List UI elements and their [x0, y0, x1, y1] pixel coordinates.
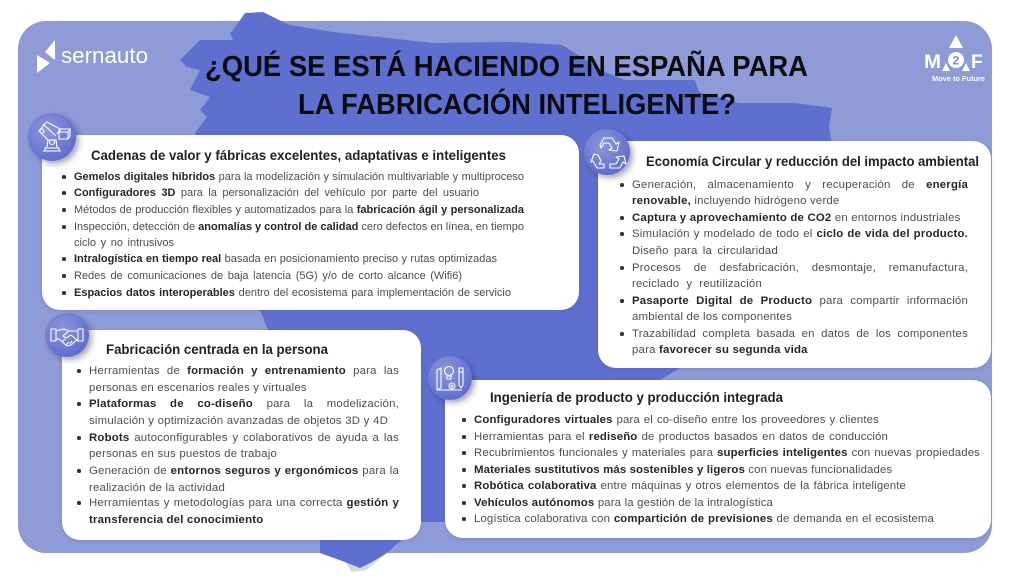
- panel: economía circular: Pasaporte Digital de Producto para compartir información: [632, 295, 968, 307]
- logo: Move to Future: Move to Future: [932, 74, 985, 83]
- panel: fabricación centrada en la persona: Herramientas y metodologías para una correcta gestión y: [89, 497, 399, 509]
- panel: ingeniería de producto: Recubrimientos funcionales y materiales para superficies inteligentes con nuevas propiedades: [474, 447, 980, 459]
- icon: recycling: [584, 129, 636, 182]
- panel: fabricación centrada en la persona: Plataformas de co-diseño para la modelización,: [89, 398, 399, 410]
- panel: cadenas de valor: Configuradores 3D para la personalización del vehículo por parte del usuario: [74, 187, 479, 199]
- logo: sernauto: sernauto: [61, 43, 148, 68]
- heading: ingeniería de producto: Ingeniería de producto y producción integrada: [490, 389, 783, 405]
- panel: economía circular: para favorecer su segunda vida: [632, 344, 808, 356]
- panel: fabricación centrada en la persona: Robots autoconfigurables y colaborativos de ayuda a las: [89, 432, 399, 444]
- panel: fabricación centrada en la persona: simulación y optimización avanzadas de objetos 3D y 4D: [89, 415, 388, 427]
- panel: ingeniería de producto: Herramientas para el rediseño de productos basados en datos de conducción: [474, 431, 888, 443]
- text block: fabricación centrada en la persona: [77, 365, 399, 526]
- panel: cadenas de valor: Espacios datos interoperables dentro del ecosistema para implementación de servicio: [74, 287, 511, 299]
- panel: cadenas de valor: [42, 135, 579, 310]
- heading: cadenas de valor: Cadenas de valor y fábricas excelentes, adaptativas e inteligentes: [91, 147, 506, 163]
- panel: cadenas de valor: Redes de comunicaciones de baja latencia (5G) y/o de corto alcance (Wifi6): [74, 270, 462, 282]
- logo: Move to Future: M: [924, 52, 941, 73]
- panel: fabricación centrada en la persona: realización de la actividad: [89, 482, 225, 494]
- logo: sernauto: [37, 40, 148, 73]
- heading: fabricación centrada en la persona: Fabricación centrada en la persona: [106, 341, 328, 357]
- panel: cadenas de valor: ciclo y no intrusivos: [74, 237, 174, 249]
- panel: economía circular: ambiental de los componentes: [632, 311, 792, 323]
- panel: ingeniería de producto: [445, 380, 991, 538]
- panel: economía circular: Captura y aprovechamiento de CO2 en entornos industriales: [632, 212, 961, 224]
- panel: fabricación centrada en la persona: transferencia del conocimiento: [89, 514, 263, 526]
- text block: ingeniería de producto: [462, 414, 980, 525]
- panel: economía circular: renovable, incluyendo hidrógeno verde: [632, 195, 840, 207]
- panel: ingeniería de producto: Materiales sustitutivos más sostenibles y ligeros con nuevas funcionalidades: [474, 464, 892, 476]
- panel: economía circular: reciclado y reutilización: [632, 278, 762, 290]
- panel: economía circular: Generación, almacenamiento y recuperación de energía: [632, 179, 968, 191]
- panel: economía circular: Procesos de desfabricación, desmontaje, remanufactura,: [632, 262, 968, 274]
- panel: fabricación centrada en la persona: [62, 330, 421, 540]
- panel: economía circular: [598, 141, 991, 368]
- title: ¿QUÉ SE ESTÁ HACIENDO EN ESPAÑA PARA: [205, 49, 808, 83]
- panel: ingeniería de producto: Robótica colaborativa entre máquinas y otros elementos de la fábrica inteligente: [474, 480, 906, 492]
- panel: ingeniería de producto: Vehículos autónomos para la gestión de la intralogística: [474, 497, 773, 509]
- panel: fabricación centrada en la persona: Herramientas de formación y entrenamiento para las: [89, 365, 399, 377]
- icon: product engineering: [428, 356, 478, 406]
- text block: cadenas de valor: [62, 171, 524, 299]
- panel: fabricación centrada en la persona: personas en escenarios reales y virtuales: [89, 382, 307, 394]
- panel: cadenas de valor: Inspección, detección de anomalías y control de calidad cero defectos en línea, en tiempo: [74, 221, 524, 233]
- panel: economía circular: Diseño para la circularidad: [632, 245, 778, 257]
- panel: cadenas de valor: Intralogística en tiempo real basada en posicionamiento preciso y rutas optimizadas: [74, 253, 497, 265]
- text block: economía circular: [620, 179, 968, 356]
- logo: Move to Future: F: [971, 52, 983, 73]
- panel: ingeniería de producto: Configuradores virtuales para el co-diseño entre los proveedores y clientes: [474, 414, 879, 426]
- panel: economía circular: Trazabilidad completa basada en datos de los componentes: [632, 328, 968, 340]
- panel: cadenas de valor: Gemelos digitales híbridos para la modelización y simulación multivariable y multiproceso: [74, 171, 524, 183]
- panel: cadenas de valor: Métodos de producción flexibles y automatizados para la fabricación ágil y personalizada: [74, 204, 524, 216]
- panel: fabricación centrada en la persona: Generación de entornos seguros y ergonómicos para la: [89, 465, 399, 477]
- panel: ingeniería de producto: Logística colaborativa con compartición de previsiones de demanda en el ecosistema: [474, 513, 934, 525]
- icon: robot arm: [28, 113, 82, 168]
- panel: economía circular: Simulación y modelado de todo el ciclo de vida del producto.: [632, 228, 968, 240]
- logo: Move to Future: [924, 35, 985, 83]
- panel: fabricación centrada en la persona: personas en sus puestos de trabajo: [89, 448, 277, 460]
- title: LA FABRICACIÓN INTELIGENTE?: [298, 87, 736, 121]
- logo: Move to Future: 2: [953, 54, 960, 68]
- icon: handshake: [45, 313, 96, 364]
